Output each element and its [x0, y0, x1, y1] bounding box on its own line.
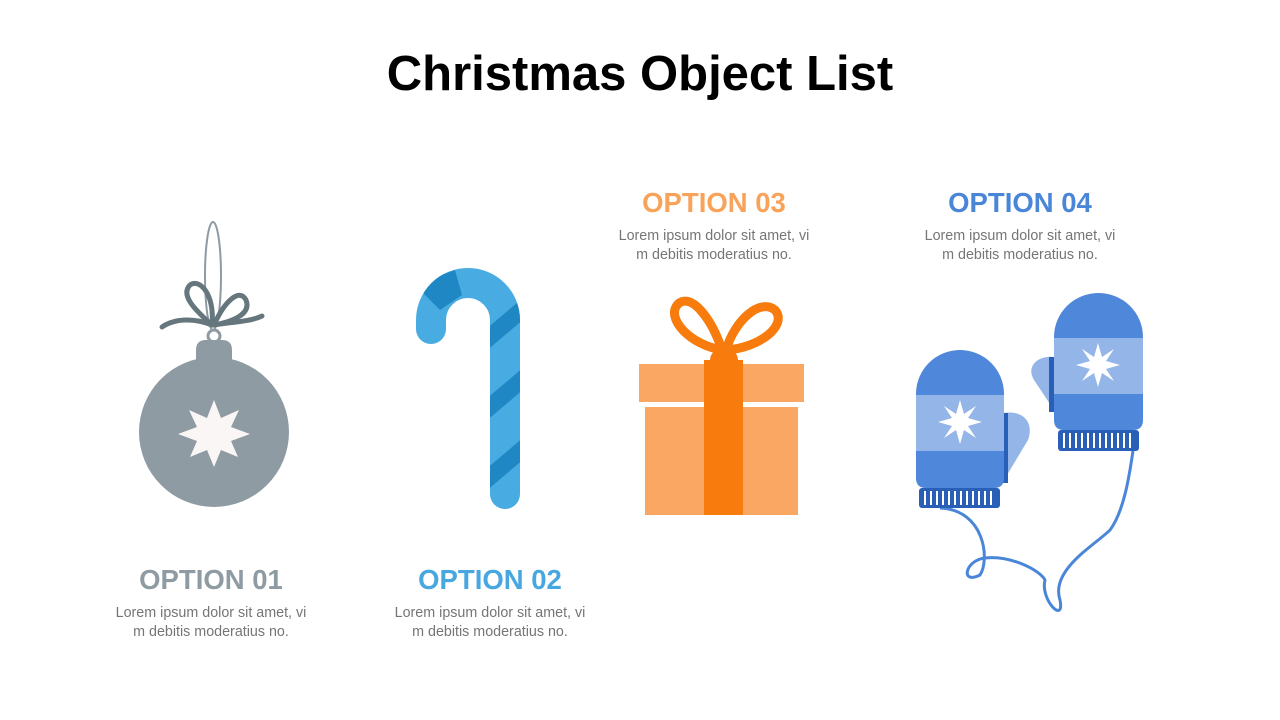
- title: Christmas Object List: [387, 47, 893, 101]
- text: option 04: [925, 187, 1115, 263]
- text: option 01: Lorem ipsum dolor sit amet, vi: [116, 605, 306, 621]
- text: option 03: Lorem ipsum dolor sit amet, vi: [619, 228, 809, 244]
- text: option 01: OPTION 01: [139, 564, 283, 595]
- text: option 01: m debitis moderatius no.: [133, 624, 289, 640]
- text: option 04: Lorem ipsum dolor sit amet, vi: [925, 228, 1115, 244]
- icon: candy cane: [415, 270, 525, 494]
- text: option 02: OPTION 02: [418, 564, 562, 595]
- text: option 01: [116, 564, 306, 640]
- text: option 02: [395, 564, 585, 640]
- icon: gift box: [639, 301, 804, 515]
- text: option 04: OPTION 04: [948, 187, 1092, 218]
- icon: ornament: [139, 222, 289, 507]
- text: option 02: Lorem ipsum dolor sit amet, vi: [395, 605, 585, 621]
- illustrations: [139, 221, 1143, 612]
- text: option 04: m debitis moderatius no.: [942, 247, 1098, 263]
- text: option 03: [619, 187, 809, 263]
- text: option 02: m debitis moderatius no.: [412, 624, 568, 640]
- icon: mittens: [916, 293, 1143, 610]
- text: option 03: m debitis moderatius no.: [636, 247, 792, 263]
- text: option 03: OPTION 03: [642, 187, 786, 218]
